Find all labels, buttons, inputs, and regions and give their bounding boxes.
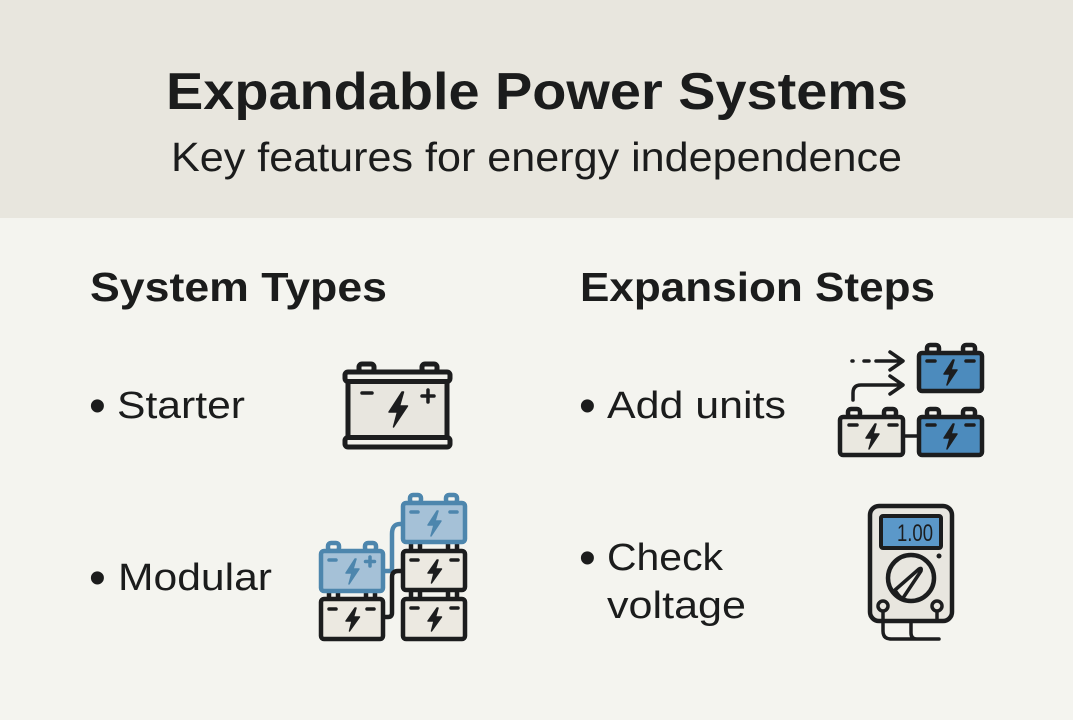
heading: expansion steps: Expansion Steps — [580, 264, 935, 310]
battery: top blue — [919, 345, 982, 391]
arrow: curved — [853, 376, 903, 400]
dial pointer — [895, 568, 921, 598]
battery: bottom right blue — [919, 409, 982, 455]
icon: multimeter — [870, 506, 952, 639]
subtitle: Key features for energy independence — [171, 134, 902, 180]
indicator dot — [936, 554, 942, 558]
heading: system types: System Types — [90, 264, 387, 310]
battery: bottom left — [321, 591, 383, 639]
dial — [888, 555, 934, 601]
probes — [883, 610, 939, 639]
title: Expandable Power Systems — [166, 63, 908, 121]
connector: blue wire — [384, 524, 403, 571]
bullet: check voltage: voltage — [607, 585, 746, 627]
battery: middle right — [403, 543, 465, 590]
connector — [903, 434, 919, 438]
bullet: add units: Add units — [607, 385, 786, 427]
icon: modular battery stack — [321, 495, 465, 639]
bullet: starter — [89, 380, 245, 433]
arrow: dashed — [852, 352, 903, 370]
bullet: modular — [89, 552, 272, 605]
display reading: 1.00 — [897, 520, 933, 547]
bullet: starter: • — [89, 380, 106, 433]
meter body — [870, 506, 952, 621]
icon: add units — [840, 345, 982, 455]
bullet: starter: Starter — [117, 385, 245, 427]
bullet: modular: • — [89, 552, 106, 605]
icon: starter battery — [345, 364, 450, 447]
bullet: check voltage — [579, 532, 746, 627]
bullet: check voltage: Check — [607, 537, 724, 579]
bullet: modular: Modular — [118, 557, 272, 599]
battery: bottom left — [840, 409, 903, 455]
battery: bottom right — [403, 591, 465, 639]
bullet: check voltage: • — [579, 532, 596, 585]
bullet: add units — [579, 380, 786, 433]
battery: left blue — [321, 543, 383, 591]
display — [881, 516, 941, 548]
bullet: add units: • — [579, 380, 596, 433]
connector: black wire — [384, 571, 403, 617]
battery: top right blue — [403, 495, 465, 542]
